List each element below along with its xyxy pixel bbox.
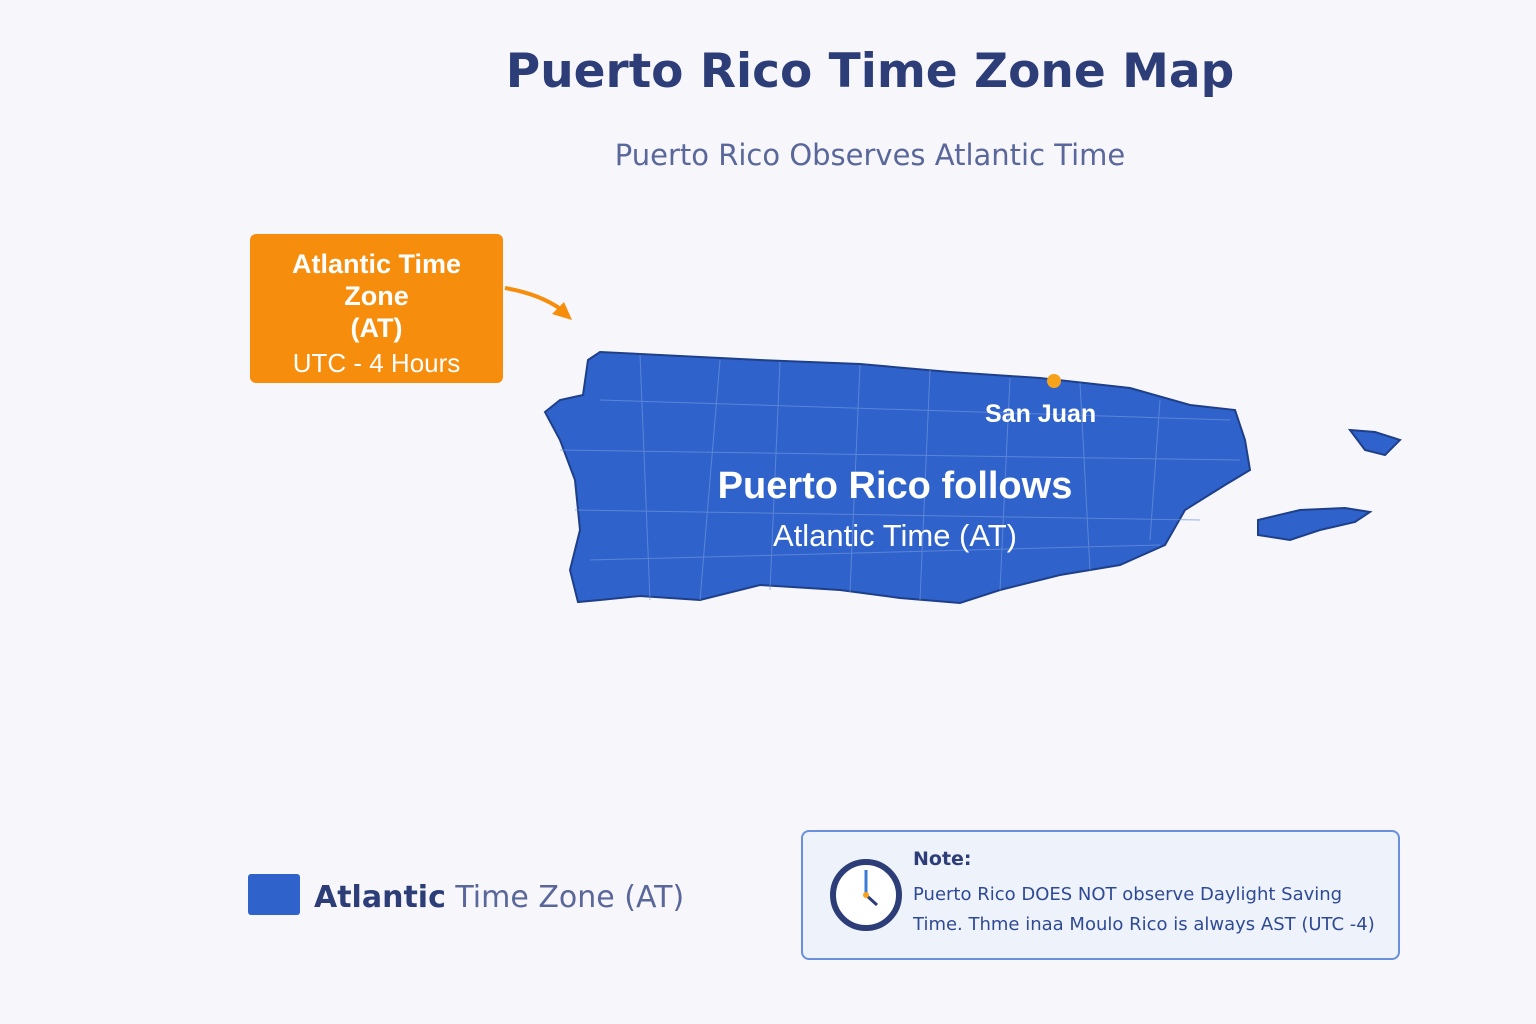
callout: Atlantic Time Zone: Zone	[344, 281, 409, 311]
legend: Atlantic Time Zone (AT)	[314, 880, 684, 915]
callout: Atlantic Time Zone: UTC - 4 Hours	[293, 348, 460, 378]
map label: Atlantic Time (AT)	[773, 518, 1017, 553]
callout: Atlantic Time Zone	[250, 234, 503, 383]
map label: Puerto Rico follows	[718, 465, 1072, 507]
note box	[801, 830, 1400, 960]
note text: Time. Thme inaa Moulo Rico is always AST (UTC -4)	[913, 914, 1375, 935]
marker: San Juan	[1047, 374, 1061, 388]
callout: Atlantic Time Zone: Atlantic Time	[292, 249, 461, 279]
note text: Note:	[913, 848, 972, 870]
subtitle: Puerto Rico Observes Atlantic Time	[615, 138, 1125, 172]
note text	[912, 848, 1375, 935]
callout: Atlantic Time Zone: (AT)	[350, 313, 402, 343]
title: Puerto Rico Time Zone Map	[506, 44, 1234, 99]
map label	[718, 465, 1072, 553]
icon: clock	[830, 859, 902, 931]
arrow: callout to map	[504, 286, 572, 320]
label: San Juan: San Juan	[985, 400, 1096, 428]
note text: Puerto Rico DOES NOT observe Daylight Saving	[913, 884, 1342, 905]
